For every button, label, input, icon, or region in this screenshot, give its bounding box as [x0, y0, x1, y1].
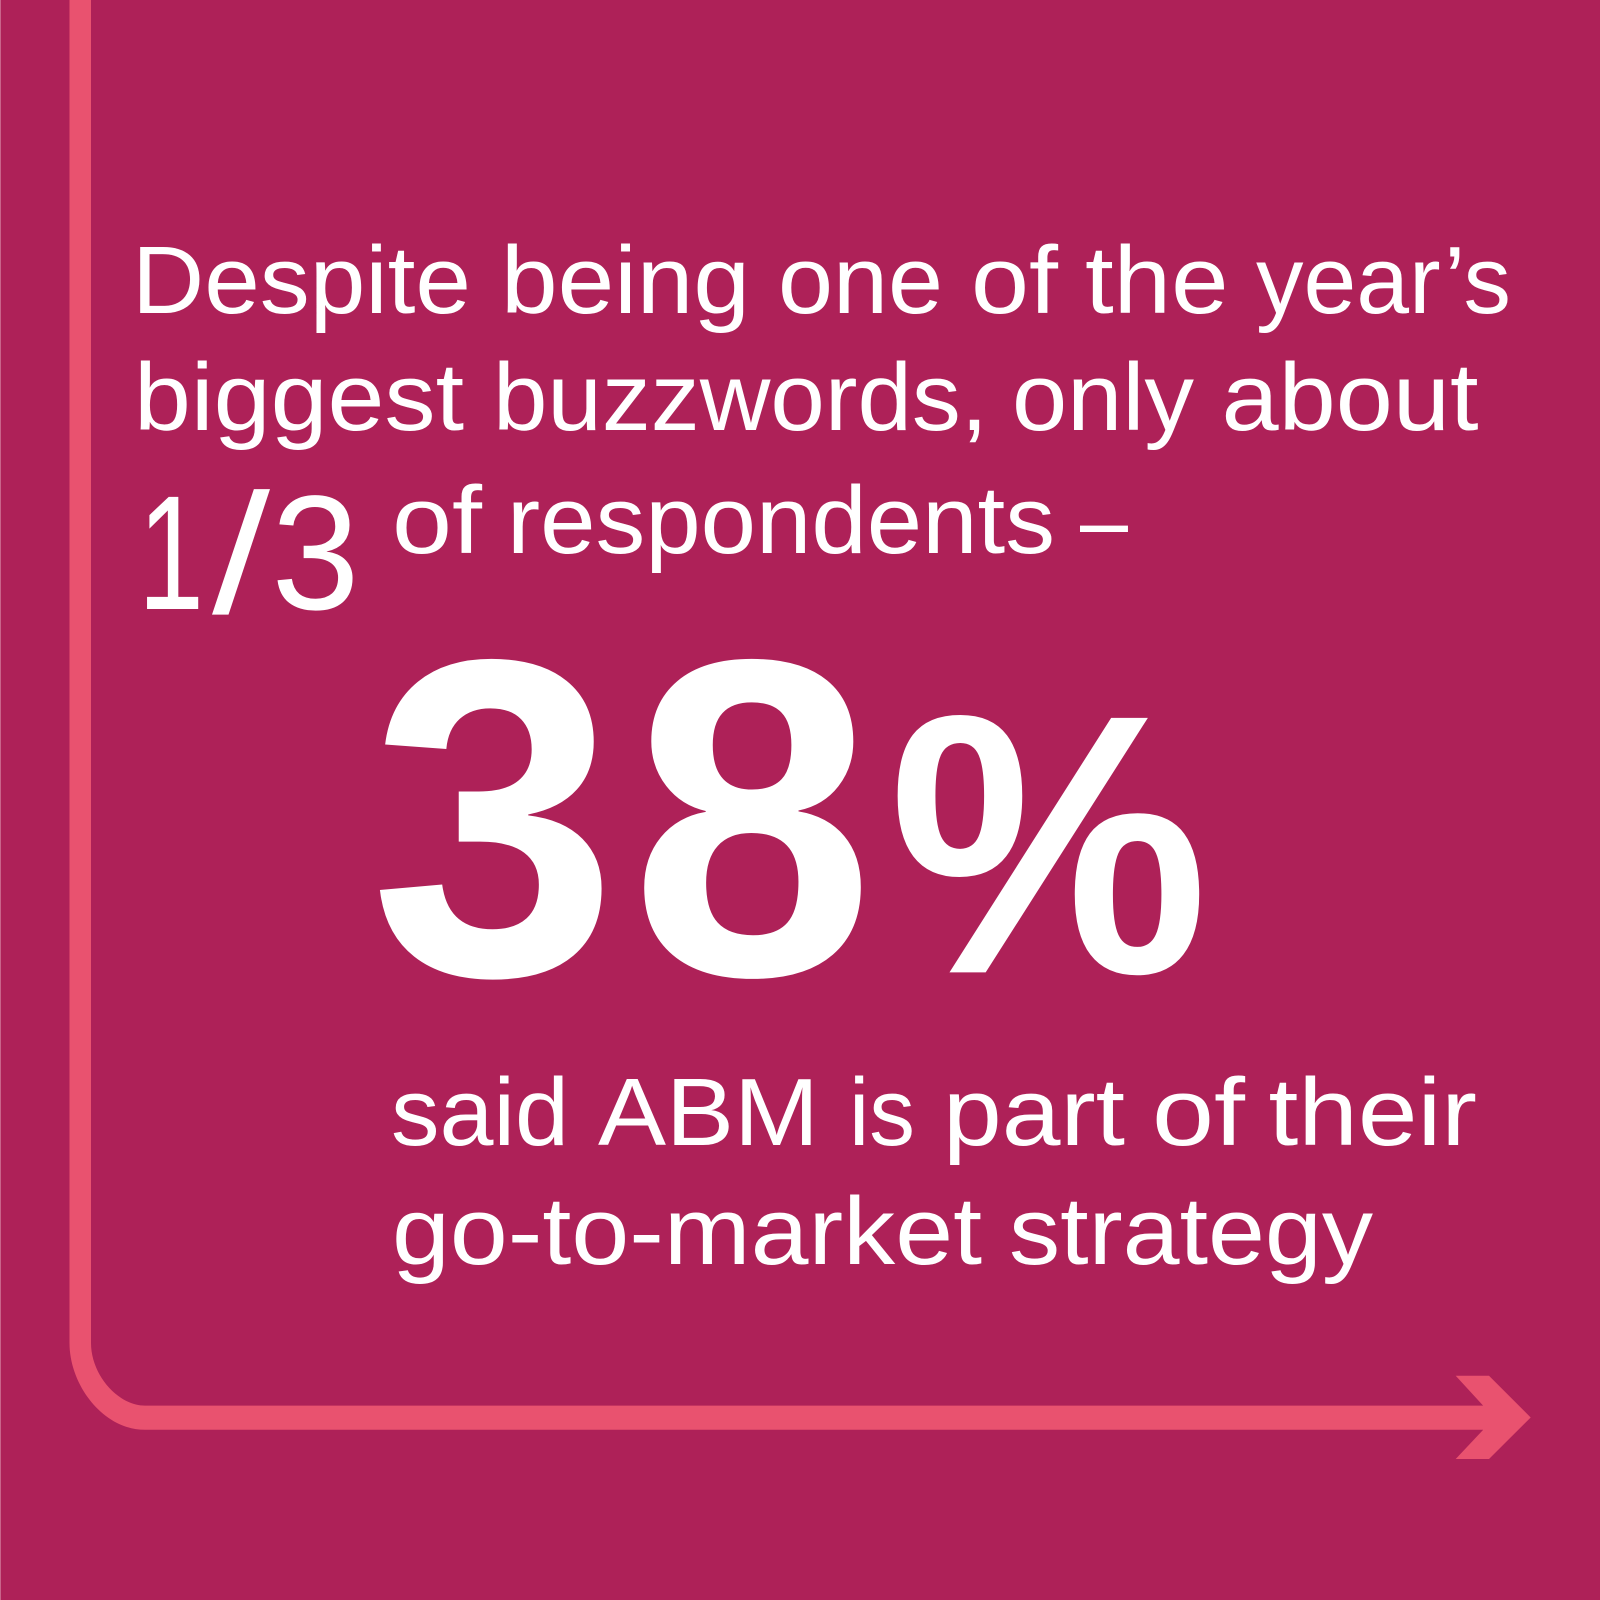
text block: of respondents: of — [392, 467, 482, 574]
text block: conclusion: of — [1152, 1059, 1245, 1166]
text block: conclusion: part — [943, 1059, 1125, 1166]
text block: intro: year’s — [1256, 227, 1511, 334]
statistic: 38% — [370, 566, 1209, 1070]
text block: of respondents: – — [1080, 467, 1129, 574]
text block: intro: buzzwords, — [493, 344, 988, 451]
text block: conclusion: strategy — [1009, 1178, 1373, 1285]
fraction: 1/3: 1 — [138, 461, 204, 644]
text block: intro — [132, 227, 1511, 451]
text block: conclusion: go-to-market — [392, 1178, 982, 1285]
text block: intro: biggest — [134, 344, 464, 451]
statistic: 38%: % — [889, 638, 1209, 1051]
text block: intro: only — [1012, 344, 1194, 451]
text block: intro: the — [1085, 227, 1228, 334]
text block: conclusion: said — [391, 1059, 569, 1166]
text block: of respondents: respondents — [507, 467, 1055, 574]
text block: conclusion — [391, 1059, 1477, 1285]
text block: intro: one — [778, 227, 943, 334]
text block: intro: being — [501, 227, 750, 334]
statistic: 38%: 8 — [630, 566, 874, 1070]
text block: intro: about — [1222, 344, 1478, 451]
statistic: 38%: 3 — [370, 566, 618, 1070]
text block: conclusion: is — [849, 1059, 915, 1166]
text block: conclusion: ABM — [598, 1059, 819, 1166]
fraction: 1/3: 3 — [272, 461, 360, 644]
fraction: 1/3 — [138, 459, 360, 650]
fraction: 1/3: / — [212, 459, 271, 650]
text block: conclusion: their — [1268, 1059, 1477, 1166]
text block: intro: Despite — [132, 227, 471, 334]
text block: intro: of — [971, 227, 1058, 334]
